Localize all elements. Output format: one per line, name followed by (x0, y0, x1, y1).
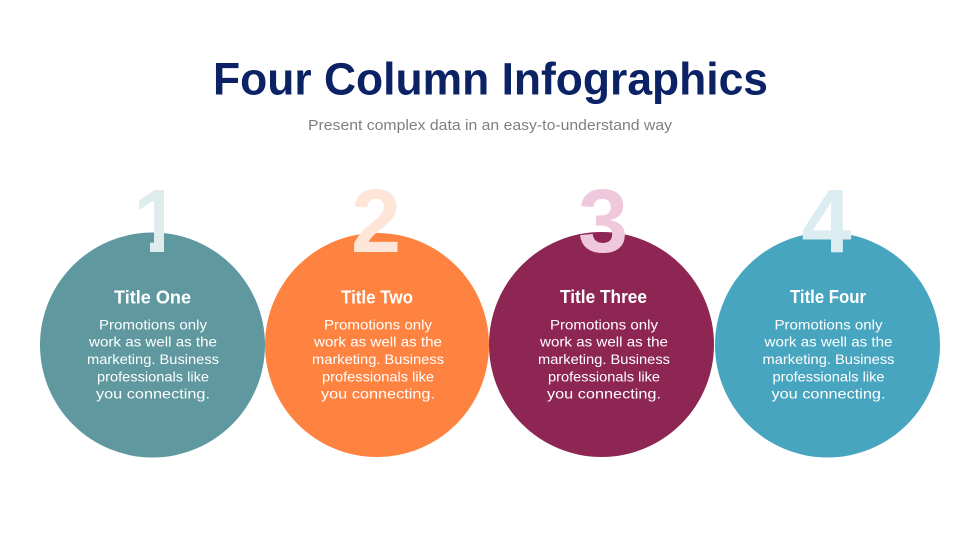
body text two: professionals like (322, 368, 434, 384)
body text one: you connecting. (96, 386, 210, 402)
circle four (715, 232, 940, 458)
circle two (265, 233, 489, 457)
circle one (40, 232, 265, 458)
heading: title two: Title Two (341, 288, 413, 308)
body text three (538, 316, 670, 402)
body text two (312, 316, 444, 402)
number 1: 1 (133, 172, 183, 272)
heading: title one: Title One (114, 288, 191, 308)
number 2: 2 (351, 172, 401, 272)
heading: title four: Title Four (790, 287, 866, 307)
body text three: work as well as the (539, 334, 668, 350)
body text one: professionals like (97, 368, 209, 384)
body text one: work as well as the (88, 334, 217, 350)
panel: column one (40, 172, 265, 458)
body text two: Promotions only (324, 316, 432, 332)
number 3: 3 (578, 172, 628, 272)
body text four: Promotions only (774, 316, 882, 332)
body text three: marketing. Business (538, 351, 670, 367)
body text four: you connecting. (772, 386, 886, 402)
body text two: work as well as the (313, 334, 442, 350)
panel: column three (489, 172, 714, 457)
panel: column four (715, 172, 940, 458)
panel: column two (265, 172, 489, 457)
circle three (489, 232, 714, 457)
body text three: professionals like (548, 368, 660, 384)
body text three: Promotions only (550, 316, 658, 332)
body text four (762, 316, 894, 402)
number 4: 4 (801, 172, 852, 272)
body text four: work as well as the (763, 334, 893, 350)
heading: title three: Title Three (560, 287, 647, 307)
subtitle: Present complex data in an easy-to-understand way (308, 117, 673, 134)
body text four: professionals like (772, 368, 885, 384)
title: Four Column Infographics (213, 54, 768, 104)
body text one: marketing. Business (87, 351, 219, 367)
body text two: marketing. Business (312, 351, 444, 367)
body text three: you connecting. (547, 386, 661, 402)
body text one: Promotions only (99, 316, 207, 332)
body text two: you connecting. (321, 386, 435, 402)
body text one (87, 316, 219, 402)
body text four: marketing. Business (762, 351, 894, 367)
